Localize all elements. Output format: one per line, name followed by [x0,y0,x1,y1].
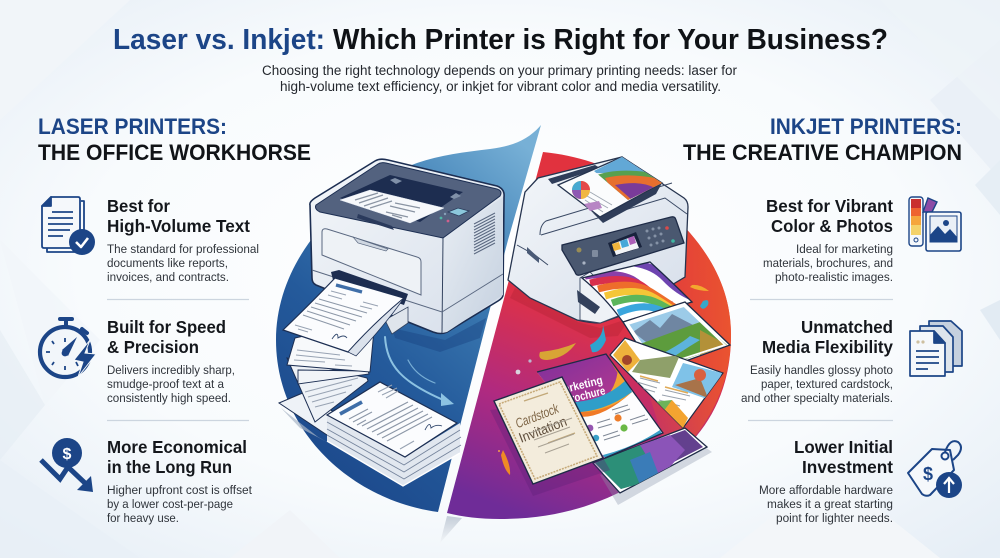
brochure bullets [587,405,648,441]
heading: Investment [802,457,893,477]
base line [312,270,503,312]
brochure title: Marketing [555,375,604,398]
cardstock invitation [490,377,610,496]
laser heading: LASER PRINTERS: [38,114,227,139]
feature: economical [41,437,253,525]
icon: stopwatch [40,319,96,377]
title: Laser vs. Inkjet: [113,24,325,56]
body [759,483,893,525]
icon: falling dollar: $ [63,446,72,463]
heading: Color & Photos [771,216,893,236]
icon: price tag [908,441,962,498]
feature: investment [759,437,962,525]
icon: stacked documents [910,321,962,376]
card title: Cardstock [513,401,562,431]
front door [322,229,421,295]
laser heading: THE OFFICE WORKHORSE [38,140,311,165]
top panel [316,163,501,238]
heading: Best for [107,196,170,216]
shadow [392,318,486,352]
inkjet heading [683,114,962,165]
title [113,24,888,56]
touchscreen [608,232,642,257]
right side face [442,197,503,333]
heading: Built for Speed [107,317,226,337]
subtitle: high-volume text efficiency, or inkjet for vibrant color and media versatility. [280,79,721,94]
body: Delivers incredibly sharp, [107,363,235,377]
laser features panel [38,114,311,525]
body: Higher upfront cost is offset [107,483,253,497]
heading: & Precision [107,337,199,357]
fanned sheet 4 [287,358,368,422]
icon: swatches and photo [909,197,961,251]
inkjet features panel [683,114,962,525]
document on scanner [558,155,665,217]
heading [766,196,893,236]
body [310,159,504,334]
body: materials, brochures, and [763,256,893,270]
inkjet heading: INKJET PRINTERS: [770,114,962,139]
heading: More Economical [107,437,247,457]
inkjet heading: THE CREATIVE CHAMPION [683,140,962,165]
top sheet from printer [283,278,404,356]
body [107,242,259,284]
heading: Lower Initial [794,437,893,457]
body: Ideal for marketing [796,242,893,256]
scanner tray and back bar [548,165,662,223]
lid seam [517,183,687,265]
bottom photo print [593,428,712,505]
arrow swoosh [385,337,454,406]
heading: High-Volume Text [107,216,250,236]
body: More affordable hardware [759,483,893,497]
body [741,363,893,405]
heading: Media Flexibility [762,337,893,357]
body [107,363,235,405]
heading: Best for Vibrant [766,196,893,216]
body: point for lighter needs. [776,511,893,525]
body: documents like reports, [107,256,228,270]
tri-fold flyer [610,338,723,428]
heading [107,196,250,236]
subtitle: Choosing the right technology depends on your primary printing needs: laser for [262,63,737,78]
tray lip [357,214,394,230]
laser heading [38,114,311,165]
inkjet output prints [490,262,730,505]
lower sheet [279,392,345,435]
divider tail shadow [440,516,462,543]
rainbow print [582,262,700,326]
laser printer [310,159,504,352]
heading [794,437,893,477]
feature: speed [40,317,235,405]
heading [762,317,893,357]
heading [107,317,226,357]
control panel [562,217,684,275]
red half [447,152,731,519]
central split circle [276,125,731,543]
body [107,483,253,525]
side latch [527,247,539,263]
body: The standard for professional [107,242,259,256]
fanned sheet 3 [298,370,369,384]
icon: falling dollar [41,438,93,492]
heading: in the Long Run [107,457,232,477]
body: paper, textured cardstock, [761,377,893,391]
body: smudge-proof text at a [107,377,224,391]
small paper guide [385,307,408,334]
marketing brochure [535,354,664,462]
body: makes it a great starting [767,497,893,511]
colour splashes [498,285,709,475]
feature: media [741,317,962,405]
subtitle [262,63,737,94]
body [508,157,688,323]
laser paper sheets [279,278,461,486]
body: consistently high speed. [107,391,231,405]
body: by a lower cost-per-page [107,497,233,511]
body: photo-realistic images. [775,270,893,284]
printed page on tray [340,190,444,223]
control panel display [448,208,469,216]
title: Which Printer is Right for Your Business? [333,24,888,56]
landscape print [622,301,732,360]
icon: document check [42,197,95,255]
lower body [580,272,628,323]
shadow on red [510,288,630,338]
feature: vibrant color [763,196,961,284]
body: Easily handles glossy photo [750,363,893,377]
brochure title [555,375,607,409]
blue half [276,125,541,512]
body: and other specialty materials. [741,391,893,405]
body: for heavy use. [107,511,179,525]
body: invoices, and contracts. [107,270,229,284]
body [763,242,893,284]
output recess [340,175,463,222]
icon: price tag: $ [923,464,933,484]
heading [107,437,247,477]
output slot [331,270,408,305]
heading: Unmatched [801,317,893,337]
brochure title: Brochure [563,385,607,407]
fanned sheet 2 [287,320,375,372]
orange wash on red half [620,190,731,462]
feature: high-volume text [42,196,259,284]
inkjet printer [508,155,688,338]
vent [474,213,495,254]
cardstock invitation: Invitation [517,413,569,446]
paper stack [327,382,461,486]
